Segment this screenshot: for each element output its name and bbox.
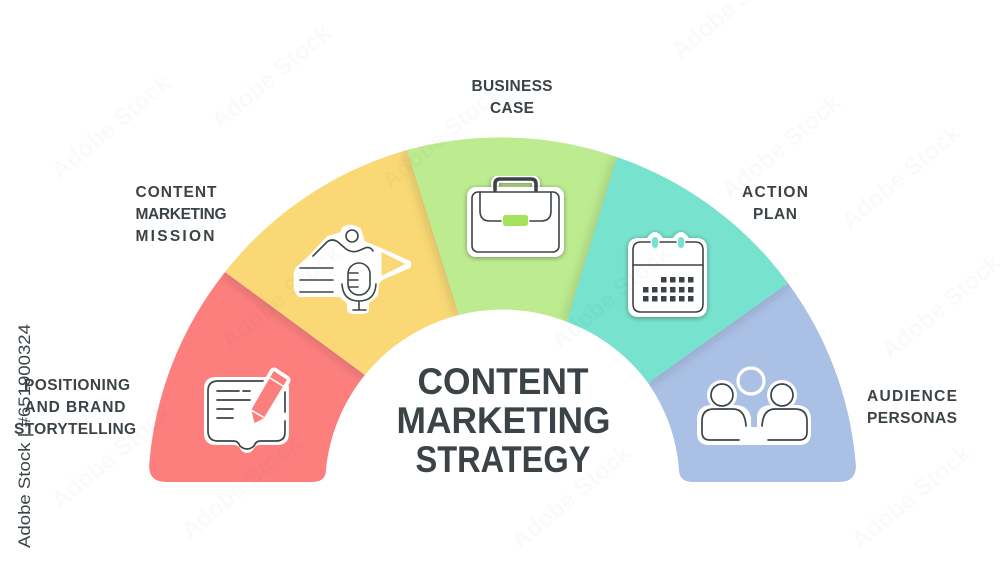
label: action plan: PLAN [753,206,797,223]
title [396,361,610,480]
text: Adobe Stock [207,19,337,135]
segment: action plan [567,157,788,383]
label: content marketing mission: MARKETING [136,206,226,223]
icon: calendar [628,232,707,317]
label: business case: BUSINESS [472,78,552,95]
label: content marketing mission [136,184,226,245]
segment: positioning and brand storytelling [149,272,365,482]
segment: business case [407,137,617,322]
text: Adobe Stock [717,89,847,205]
label: audience personas [867,388,957,427]
label: positioning and brand storytelling: AND BRAND [24,399,126,416]
vertical stock id text: Adobe Stock | #651900324 [15,324,34,548]
text: Adobe Stock [177,429,307,545]
icon: note with pencil [204,372,289,453]
label: action plan: ACTION [742,184,808,201]
text: Adobe Stock [847,439,977,555]
label: action plan [742,184,808,223]
label: positioning and brand storytelling [14,377,136,438]
segment: audience personas [648,283,856,482]
text: Adobe Stock [377,79,507,195]
label: audience personas: AUDIENCE [867,388,957,405]
icon: audience people [697,368,811,445]
label: content marketing mission: CONTENT [136,184,217,201]
icon: briefcase [467,179,564,257]
label: audience personas: PERSONAS [867,410,957,427]
icon: microphone and media [294,226,410,313]
title: MARKETING [396,400,610,441]
label: business case: CASE [490,100,534,117]
text: Adobe Stock [47,69,177,185]
label: business case [472,78,552,117]
text: Adobe Stock [47,399,177,515]
text: Adobe Stock [837,119,967,235]
title: STRATEGY [416,439,591,480]
text: Adobe Stock [547,239,677,355]
chart: semicircle segments [149,137,856,482]
segment: content marketing mission [225,150,459,375]
label: positioning and brand storytelling: POSITIONING [24,377,130,394]
label: positioning and brand storytelling: STORYTELLING [14,421,136,438]
text: Adobe Stock [507,439,637,555]
text: Adobe Stock [217,239,347,355]
label: content marketing mission: MISSION [136,228,214,245]
title: CONTENT [418,361,589,402]
